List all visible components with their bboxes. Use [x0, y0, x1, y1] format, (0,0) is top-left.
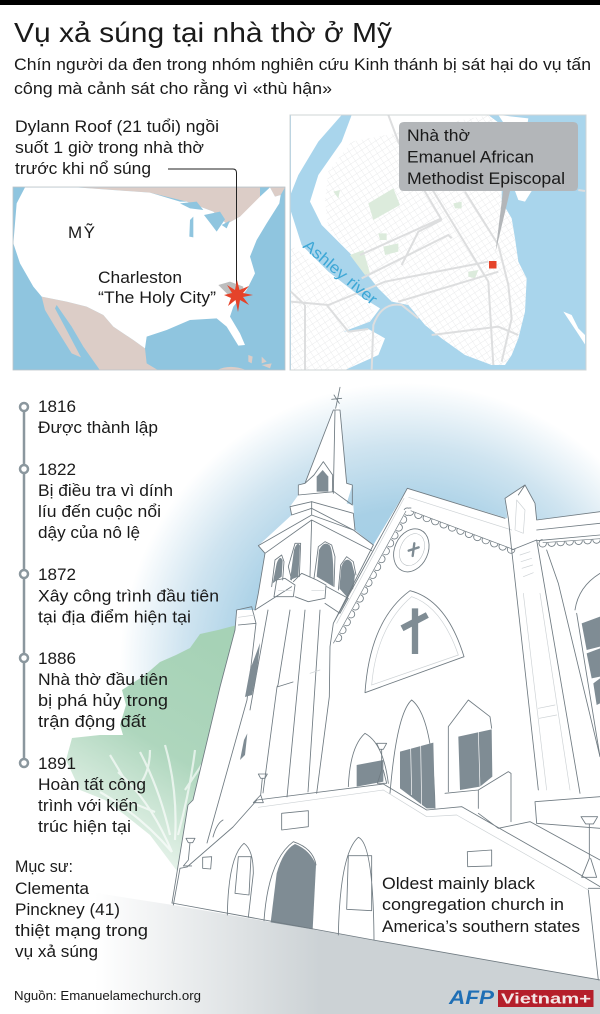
note: pastor Pinckney: Pinckney (41)	[15, 900, 120, 919]
church caption: congregation church in	[382, 895, 564, 914]
South Carolina highlight	[218, 282, 244, 294]
timeline event: 1886	[38, 649, 168, 731]
tree	[66, 625, 240, 875]
sky glow	[100, 378, 600, 978]
map frame	[290, 115, 586, 370]
arched window with cross	[365, 591, 464, 693]
label: Charleston: Charleston	[98, 268, 182, 287]
upper windows and doors	[357, 729, 511, 822]
church marker	[489, 261, 496, 268]
timeline event: 1822: 1822	[38, 460, 76, 479]
church caption: America’s southern states	[382, 917, 580, 936]
timeline event: 1886: bị phá hủy trong	[38, 691, 168, 710]
tower buttresses	[172, 573, 348, 903]
timeline event: 1872: 1872	[38, 565, 76, 584]
Great Lakes	[180, 202, 230, 237]
note: pastor Pinckney: Mục sư:	[15, 857, 73, 876]
timeline event: 1891: Hoàn tất công	[38, 775, 146, 794]
panel: USA map	[13, 187, 285, 370]
timeline event: 1886: trận động đất	[38, 712, 146, 731]
lower doors and plaques	[203, 811, 492, 940]
panel: Charleston street map	[290, 115, 586, 370]
timeline event: 1822: dậy của nô lệ	[38, 523, 140, 542]
street grid	[291, 115, 527, 370]
lamps	[183, 743, 598, 877]
spire	[290, 387, 355, 530]
logo: Vietnam+	[498, 990, 594, 1008]
dormer window	[317, 470, 328, 492]
title: Vụ xả súng tại nhà thờ ở Mỹ	[14, 17, 392, 48]
timeline event: 1822: líu đến cuộc nổi	[38, 502, 161, 521]
callout: Dylann Roof: trước khi nổ súng	[15, 159, 151, 178]
church caption	[382, 874, 580, 936]
label: Charleston	[98, 268, 216, 307]
timeline event: 1822: Bị điều tra vì dính	[38, 481, 173, 500]
timeline event: 1816	[38, 397, 158, 437]
label: Charleston: “The Holy City”	[98, 288, 216, 307]
timeline event: 1872: tại địa điểm hiện tại	[38, 608, 191, 626]
label: Ashley river: Ashley river	[299, 237, 381, 309]
map frame	[13, 187, 285, 370]
timeline event: 1886: 1886	[38, 649, 76, 668]
United States land	[13, 187, 281, 348]
logo: Vietnam+: Vietnam+	[501, 992, 591, 1008]
timeline event: 1886: Nhà thờ đầu tiên	[38, 670, 168, 689]
belfry	[255, 502, 373, 610]
subtitle	[14, 55, 591, 98]
parks	[333, 188, 478, 278]
tower window	[240, 643, 260, 760]
timeline event: 1891: trúc hiện tại	[38, 817, 131, 836]
callout: church name	[399, 122, 578, 252]
timeline event: 1891: 1891	[38, 754, 76, 773]
timeline event: 1872: Xây công trình đầu tiên	[38, 586, 219, 606]
timeline	[20, 397, 219, 836]
church illustration	[172, 387, 600, 980]
Mexico land	[42, 297, 158, 370]
note: pastor Pinckney	[15, 857, 148, 961]
land areas	[291, 115, 585, 370]
door arches	[348, 700, 492, 808]
callout: Dylann Roof: suốt 1 giờ trong nhà thờ	[15, 138, 204, 157]
main gable	[317, 488, 512, 793]
church silhouette	[172, 405, 600, 980]
top black bar	[0, 0, 600, 5]
callout: church name: Methodist Episcopal	[407, 169, 565, 188]
timeline event: 1891	[38, 754, 146, 836]
note: pastor Pinckney: vụ xả súng	[15, 942, 98, 961]
source: Nguồn: Emanuelamechurch.org	[14, 988, 201, 1003]
callout: church name: Emanuel African	[407, 148, 534, 166]
right arched window	[575, 573, 600, 757]
timeline event: 1822	[38, 460, 173, 542]
church base line	[172, 903, 600, 980]
main roads	[291, 115, 585, 370]
stair wall	[173, 784, 600, 980]
label: Mỹ: M Ỹ	[68, 223, 95, 242]
logo: AFP: AFP	[448, 988, 494, 1009]
ground	[0, 878, 600, 1014]
callout: Dylann Roof	[15, 117, 219, 178]
subtitle: Chín người da đen trong nhóm nghiên cứu Kinh thánh bị sát hại do vụ tấn	[14, 55, 591, 74]
icon: red starburst	[224, 280, 253, 312]
callout: church name: Nhà thờ	[407, 126, 470, 145]
timeline event: 1816: Được thành lập	[38, 418, 158, 437]
icon: round window with cross	[387, 523, 436, 578]
Cuba and islands	[217, 355, 272, 370]
timeline event: 1816: 1816	[38, 397, 76, 416]
Canada land	[77, 187, 285, 224]
callout: Dylann Roof: Dylann Roof (21 tuổi) ngồi	[15, 117, 219, 136]
timeline event: 1872	[38, 565, 219, 626]
right buttress	[505, 485, 600, 823]
belfry windows	[273, 544, 355, 597]
subtitle: công mà cảnh sát cho rằng vì «thù hận»	[14, 79, 332, 98]
church caption: Oldest mainly black	[382, 874, 536, 893]
note: pastor Pinckney: Clementa	[15, 879, 90, 898]
note: pastor Pinckney: thiệt mạng trong	[15, 921, 148, 940]
timeline event: 1891: trình với kiến	[38, 796, 138, 815]
scallop ornament	[332, 508, 600, 643]
leader line	[168, 169, 236, 292]
